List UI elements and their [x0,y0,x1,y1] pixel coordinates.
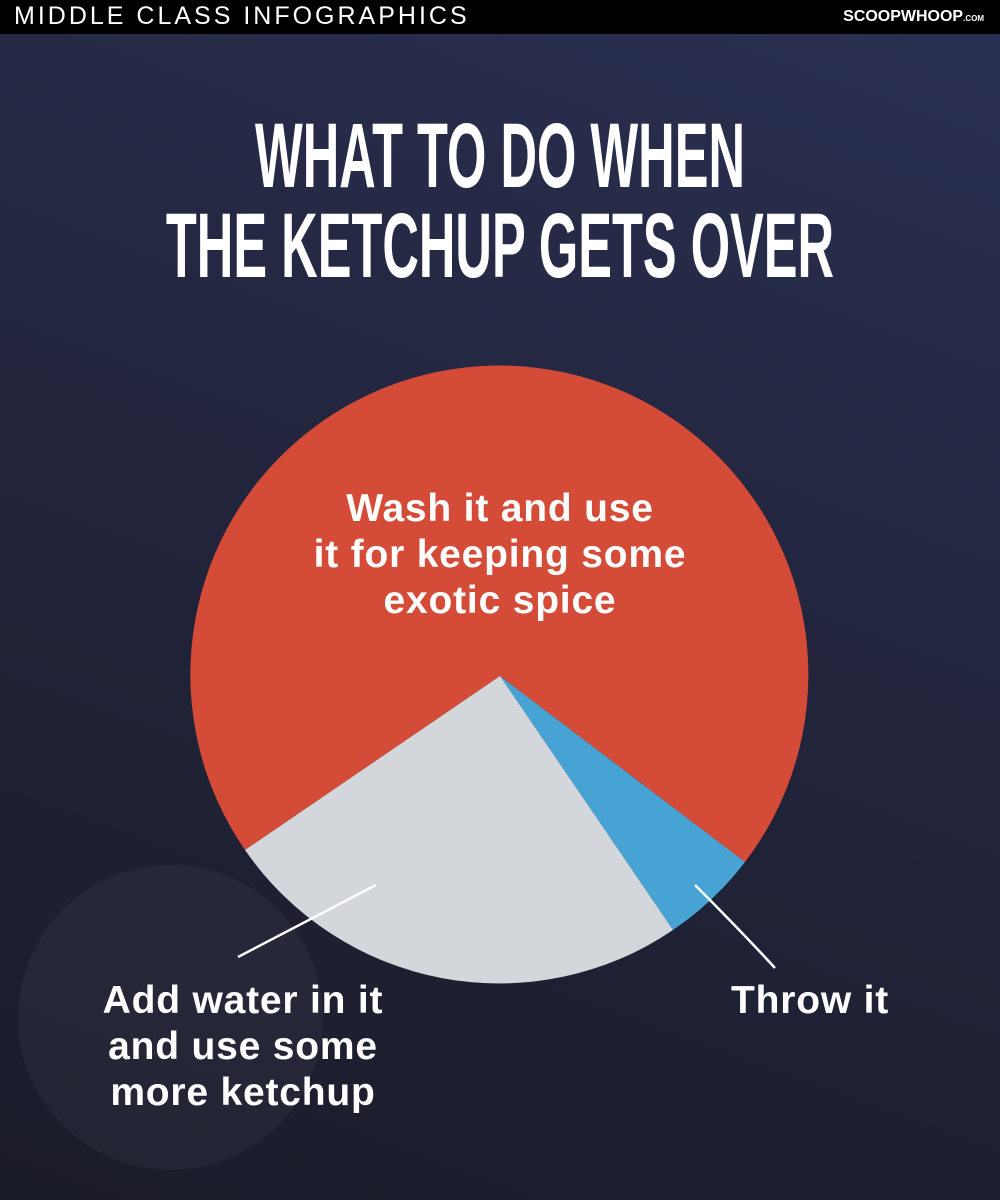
label: wash: exotic spice [384,579,616,622]
label: add water [103,979,383,1114]
label: add water: more ketchup [110,1071,376,1114]
title [166,105,834,297]
label: wash: Wash it and use [346,487,654,530]
pointer lines [238,885,775,968]
label: add water: and use some [108,1025,378,1068]
slice: throw [500,676,745,930]
header brand: SCOOPWHOOP.COM [843,8,984,25]
title: THE KETCHUP GETS OVER [166,195,834,297]
label: wash [314,487,686,622]
label: add water: Add water in it [103,979,383,1022]
slice: wash [190,366,808,862]
label: throw: Throw it [731,979,889,1022]
slice: add water [245,676,673,983]
header bar [0,0,1000,34]
header left text: MIDDLE CLASS INFOGRAPHICS [14,2,470,30]
watermark circle [18,865,323,1170]
title: WHAT TO DO WHEN [255,105,745,207]
label: wash: it for keeping some [314,533,686,576]
